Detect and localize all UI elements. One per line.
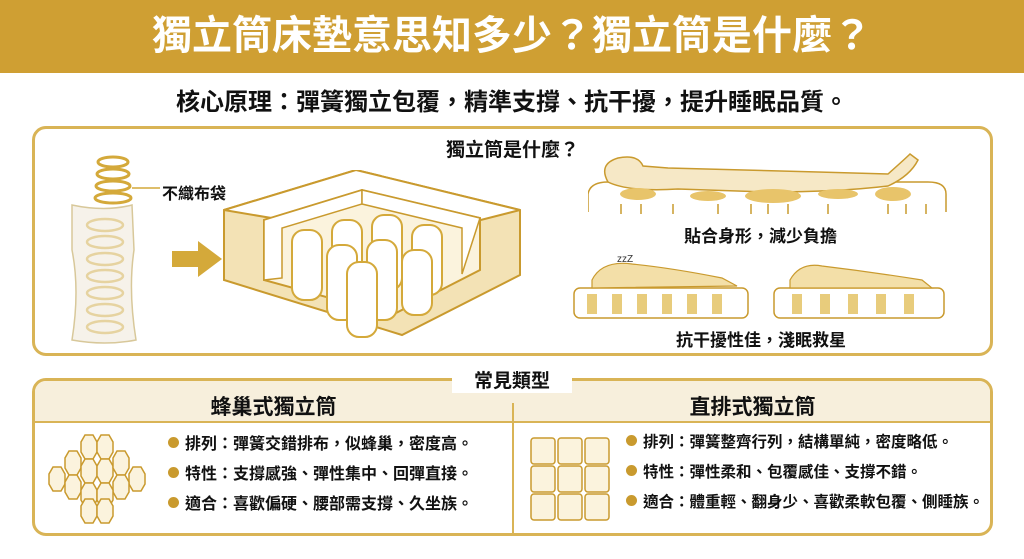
arrow (172, 241, 222, 277)
illustration: body contour (588, 153, 947, 214)
panel heading: 獨立筒是什麼？ (446, 140, 579, 161)
illustration: mattress cutaway (223, 170, 521, 338)
column heading: honeycomb: 蜂巢式獨立筒 (210, 396, 336, 419)
title: 獨立筒床墊意思知多少？獨立筒是什麼？ (152, 14, 872, 58)
list: straight features: 適合：體重輕、翻身少、喜歡柔軟包覆、側睡族。 (643, 494, 984, 511)
illustration: pocket spring (71, 156, 160, 344)
icon: honeycomb springs (48, 434, 146, 524)
subtitle: 核心原理：彈簧獨立包覆，精準支撐、抗干擾，提升睡眠品質。 (176, 89, 848, 116)
list: honeycomb features: 特性：支撐感強、彈性集中、回彈直接。 (185, 466, 473, 483)
icon: straight springs grid (530, 437, 610, 521)
list: honeycomb features: 適合：喜歡偏硬、腰部需支撐、久坐族。 (185, 496, 473, 513)
caption: anti-disturbance: 抗干擾性佳，淺眠救星 (676, 331, 846, 350)
panel: what is it (32, 126, 993, 356)
list: honeycomb features: 排列：彈簧交錯排布，似蜂巢，密度高。 (185, 436, 473, 453)
list: straight features (626, 434, 984, 511)
list: straight features: 特性：彈性柔和、包覆感佳、支撐不錯。 (643, 464, 922, 481)
column heading: straight: 直排式獨立筒 (690, 396, 816, 419)
list: straight features: 排列：彈簧整齊行列，結構單純，密度略低。 (643, 434, 953, 451)
list: honeycomb features (168, 435, 473, 513)
illustration: two sleepers (573, 254, 945, 319)
section heading: 常見類型 (474, 371, 550, 392)
title banner (0, 0, 1024, 73)
illustration: two sleepers: zzZ (617, 254, 633, 265)
label: non-woven bag: 不織布袋 (162, 186, 226, 203)
caption: fits body: 貼合身形，減少負擔 (684, 227, 837, 246)
panel: common types (32, 378, 993, 536)
section heading (452, 366, 572, 393)
